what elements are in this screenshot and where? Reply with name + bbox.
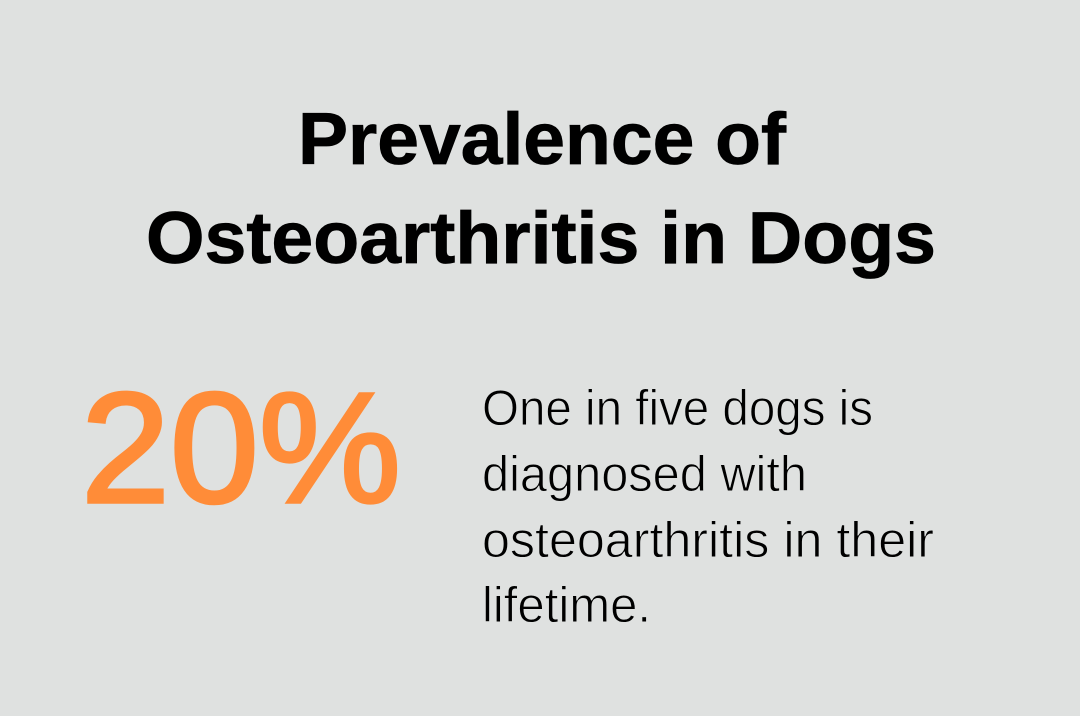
description text: osteoarthritis in their <box>482 512 934 568</box>
title: Osteoarthritis in Dogs <box>146 198 936 279</box>
description text: lifetime. <box>482 577 651 633</box>
description text: diagnosed with <box>482 446 807 502</box>
statistic: 20%: 20% <box>81 361 401 536</box>
title <box>146 99 936 279</box>
description text <box>482 380 934 633</box>
title: Prevalence of <box>298 99 787 180</box>
description text: One in five dogs is <box>482 380 873 436</box>
